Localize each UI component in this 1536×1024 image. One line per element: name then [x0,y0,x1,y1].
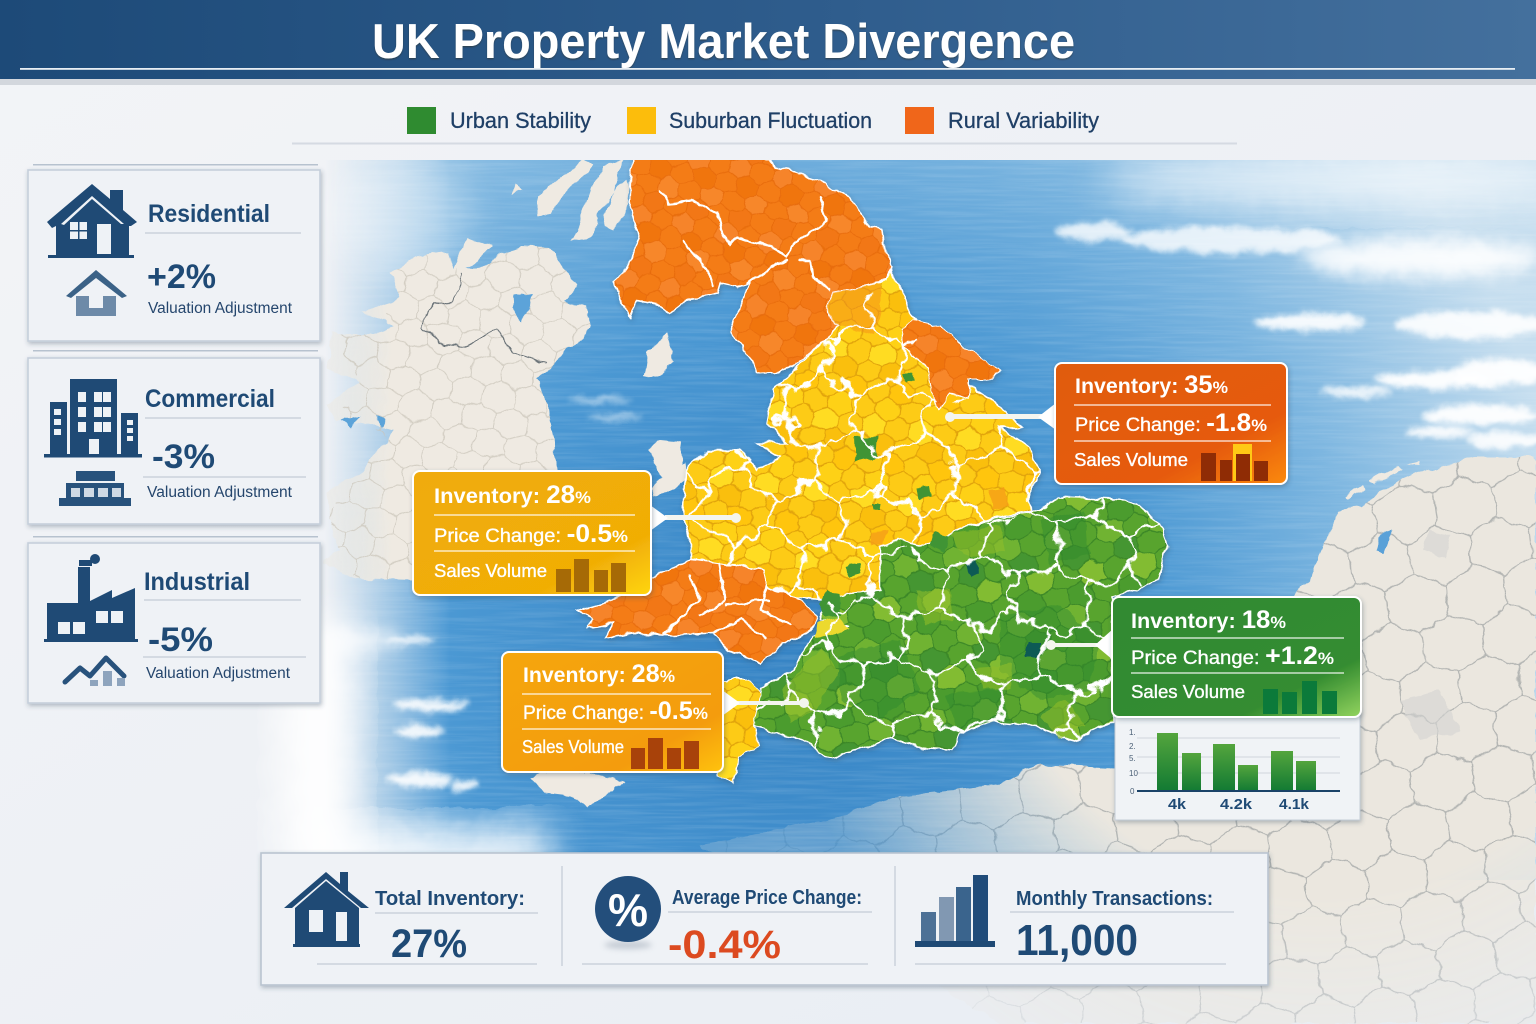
icon: percent badge [595,876,661,949]
panel: commercial [28,350,320,524]
chart card: sales volume: 4.2k [1220,796,1253,813]
Great Britain regions [577,155,1167,783]
stat: total inventory: 27% [391,922,467,966]
header band [0,0,1536,85]
Ireland and Scottish islands [322,160,690,808]
chart card: sales volume: 4k [1168,796,1187,813]
heading: commercial: Commercial [145,385,275,413]
callout: London urban: Sales Volume [1131,682,1245,702]
callout: Wales suburban [413,471,741,595]
heading: industrial: Industrial [144,568,250,596]
legend: urban stability: Urban Stability [450,108,591,133]
caption: industrial: Valuation Adjustment [146,665,291,682]
stat: monthly transactions: 11,000 [1016,916,1138,965]
mini bars [1263,681,1337,714]
stat: average price change: Average Price Change: [672,887,862,909]
panel: summary statistics [261,853,1268,985]
callout: Wales suburban: Sales Volume [434,561,547,581]
panel: residential [28,164,320,341]
callout: south west suburban [502,652,809,772]
stat: total inventory [284,872,538,966]
small southern island [530,770,625,808]
region: Midlands and North suburban (yellow) [683,272,1040,600]
callout: Wales suburban: Inventory: 28% [434,481,591,509]
value: residential: +2% [147,258,216,296]
callout: London urban: Price Change: +1.2% [1131,642,1334,670]
chart card: sales volume [1115,710,1360,820]
callout: north east rural [945,363,1287,484]
arrow: to Wales [650,505,741,531]
icon: bar chart [915,875,995,947]
callout: London urban: Inventory: 18% [1131,606,1286,634]
chart card: sales volume: 10 [1129,769,1138,778]
icon: small commercial block [59,471,131,506]
mini bars [631,738,699,769]
legend [292,107,1237,144]
icon: factory [44,554,138,642]
stat: average price change: -0.4% [668,923,781,967]
mini bars [1201,444,1268,481]
legend: rural variability: Rural Variability [948,108,1099,133]
stat: monthly transactions: Monthly Transactions: [1016,888,1213,910]
stat: monthly transactions [915,875,1234,965]
stat: average price change [582,876,872,967]
callout: north east rural: Inventory: 35% [1075,371,1228,399]
icon: small rooftop trend [65,658,125,686]
region: northern rural (orange) [613,155,892,373]
white district boundaries [658,190,1160,749]
chart card: sales volume: 2. [1129,742,1136,751]
heading: residential: Residential [148,200,270,228]
mini bars [556,559,626,592]
callout: north east rural: Sales Volume [1074,450,1188,470]
region: Cornwall and Devon suburban (yellow) [714,680,760,783]
chart card: sales volume: 4.1k [1279,796,1310,813]
chart card: sales volume: 0 [1130,787,1135,796]
value: industrial: -5% [148,621,213,659]
caption: residential: Valuation Adjustment [148,300,293,317]
region: southern urban (green) [753,497,1167,757]
panel: industrial [28,536,320,703]
Isle of Man [642,333,674,376]
callout: south west suburban: Price Change: -0.5% [523,697,708,725]
icon: office buildings [44,379,142,458]
stat: total inventory: Total Inventory: [375,888,525,910]
value: commercial: -3% [152,438,215,476]
callout: north east rural: Price Change: -1.8% [1075,409,1267,437]
arrow: to London [1046,629,1113,660]
icon: house [284,872,369,947]
chart card: sales volume: 1. [1129,728,1136,737]
title: UK Property Market Divergence [372,15,1075,69]
icon: house [47,184,137,258]
green districts in yellow [818,371,948,618]
region: Humber rural (orange) [903,320,1000,410]
green shade patches [782,510,1100,738]
region: South Wales and Severn rural (orange) [577,560,818,663]
caption: commercial: Valuation Adjustment [147,484,293,501]
continental Europe [700,457,1536,1024]
arrow: to Humber [945,403,1056,430]
icon: percent badge: % [608,884,648,936]
legend: suburban fluctuation: Suburban Fluctuation [669,108,872,133]
chart card: sales volume: 5. [1129,754,1136,763]
callout: south west suburban: Sales Volume [522,737,624,757]
callout: Wales suburban: Price Change: -0.5% [434,520,628,548]
callout: south west suburban: Inventory: 28% [523,660,675,688]
callout: London urban [1046,597,1361,717]
sea [300,160,1536,880]
map: sea and land [280,150,1536,1024]
clouds [280,150,1536,885]
Anglesey [645,440,690,497]
arrow: to South West [722,690,809,716]
icon: small house [66,270,127,316]
